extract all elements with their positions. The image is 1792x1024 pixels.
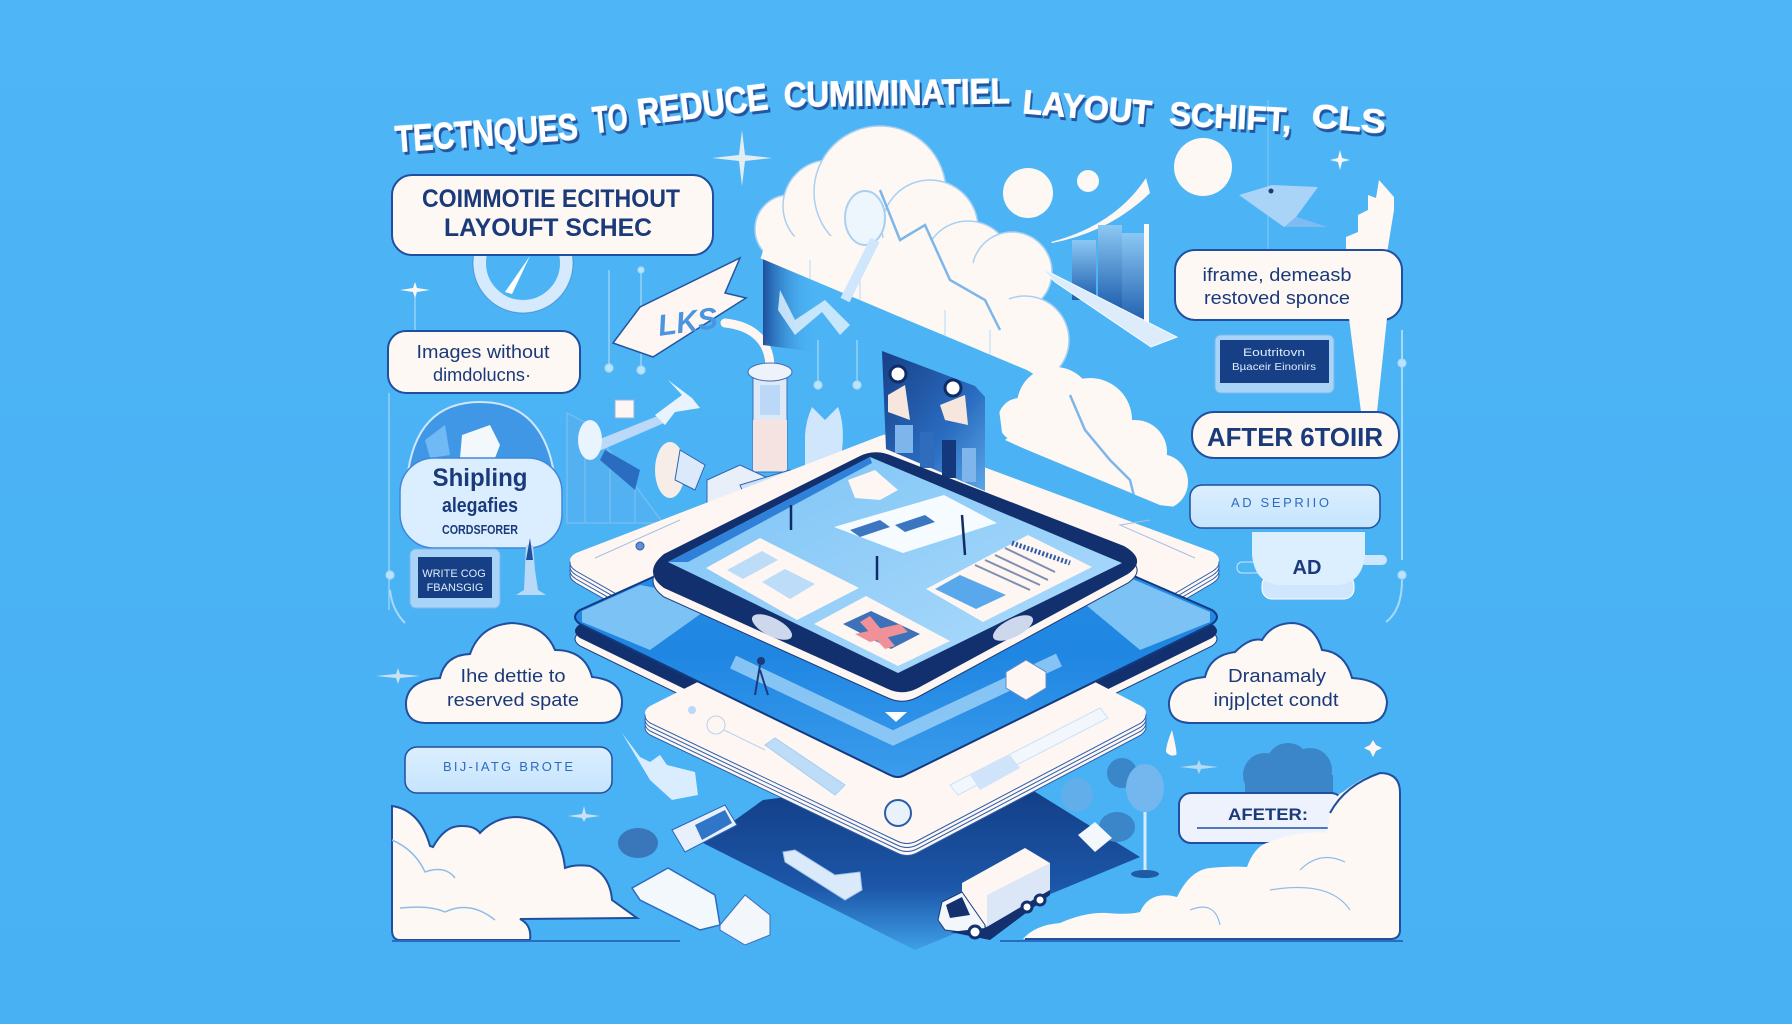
title: CUMIMINATIEL [783, 72, 1010, 115]
guide lines and dots [386, 100, 1406, 623]
panel: shipping globe callout [400, 402, 562, 548]
title: TO [591, 97, 630, 141]
panel: middle plate lower bands [575, 484, 1217, 799]
panel: navy label left: WRITE COG [422, 568, 486, 580]
illustration: chimney and smoke [707, 323, 800, 530]
panel: reserved space cloud [406, 623, 622, 723]
panel: navy label left [410, 549, 500, 608]
panel: light pill [405, 747, 612, 793]
panel: box compose without layout shift [392, 175, 713, 313]
title: CLS [1310, 97, 1387, 140]
panel: shipping globe callout: Shipling [432, 464, 528, 492]
panel: light pill: BIJ-IATG BROTE [443, 759, 573, 774]
illustration: pencil and box [578, 380, 700, 490]
panel: reserved space cloud: Ihe dettie to [460, 666, 566, 686]
panel: dramatically injected content cloud: injp|ctet condt [1214, 690, 1338, 710]
icon: droplet [1166, 730, 1176, 756]
icon: AD bowl: AD [1293, 557, 1321, 579]
icon: phone sheet [632, 868, 720, 930]
tablet buttons [748, 609, 796, 645]
title: TECTNQUES [394, 106, 579, 160]
chart: faded fence [567, 413, 663, 523]
tablet screen [668, 457, 1122, 673]
title: REDUCE [635, 76, 770, 133]
icon: light leaf [805, 407, 843, 480]
panel: reserved space cloud: reserved spate [447, 690, 579, 710]
card: upper [834, 470, 997, 553]
icon: small crate [720, 895, 770, 945]
sparkles [376, 130, 1382, 822]
icon: small glow [885, 712, 907, 722]
figure: person and basket [755, 657, 1046, 700]
icon: blue hat [618, 828, 658, 858]
card: image [814, 596, 950, 666]
illustration: truck [938, 848, 1050, 940]
cloud: bottom left [392, 806, 680, 941]
panel: ad pill: AD SEPRIIO [1231, 495, 1329, 510]
lighter plate corners [582, 578, 1210, 650]
chart: bars on plate [1041, 178, 1177, 347]
icon: tool on shadow [783, 850, 862, 900]
illustration: top circles [1003, 138, 1232, 218]
illustration: large cloud [755, 126, 1069, 400]
panel: iframe callout with spire: restoved sponce [1204, 288, 1350, 308]
panel: dark screen with figures [882, 351, 985, 491]
panel: images without dimensions: dimdolucns· [433, 365, 531, 385]
globe dome [407, 402, 555, 480]
panel: after label with cloud [1000, 773, 1403, 941]
icon: LKS arrow sign [613, 258, 746, 357]
slider tube [733, 660, 1059, 738]
panel: ad pill [1190, 485, 1380, 528]
panel: after pill: AFTER 6TOIIR [1207, 422, 1383, 452]
icon: AD bowl [1237, 532, 1387, 599]
icon: magnifier [845, 191, 885, 300]
illustration: dark panel fading [763, 257, 850, 352]
cloud: bottom right [1000, 773, 1403, 941]
panel: navy label right [1215, 335, 1334, 393]
panel: navy label right: Eoutritovn [1243, 347, 1305, 359]
panel: shipping globe callout: alegafies [442, 495, 518, 517]
icon: white arrow [622, 733, 698, 800]
card: document [926, 535, 1092, 622]
panel: images without dimensions [388, 331, 580, 393]
icon: paper plane [1239, 185, 1327, 227]
illustration: trees [1061, 758, 1164, 878]
illustration: camera [655, 442, 705, 498]
panel: box compose without layout shift: COIMMOTIE ECITHOUT [422, 185, 680, 213]
card: text blocks [706, 538, 859, 620]
panel: shipping globe callout: CORDSFORER [442, 522, 518, 537]
panel: navy label right: Bµaceir Einonirs [1232, 362, 1316, 373]
panel: images without dimensions: Images without [416, 342, 550, 362]
panel: dramatically injected content cloud: Dranamaly [1228, 666, 1326, 686]
title: LAYOUT [1021, 83, 1153, 131]
panel: after pill [1192, 412, 1399, 458]
panel: iframe callout with spire: iframe, demeasb [1202, 265, 1352, 285]
panel: bottom white plate [645, 580, 1146, 856]
panel: main tablet [653, 452, 1137, 701]
panel: navy label left: FBANSGIG [427, 582, 483, 594]
illustration: second cloud [998, 367, 1188, 510]
panel: dramatically injected content cloud [1169, 623, 1387, 723]
icon: gauge ring [473, 213, 573, 313]
icon: dark cloud [1243, 743, 1333, 797]
icon: LKS arrow sign: LKS [656, 302, 720, 343]
panel: iframe callout with spire [1175, 180, 1402, 412]
infographic canvas [376, 78, 1407, 950]
panel: rear white plate [570, 434, 1219, 765]
icon: lighthouse [516, 538, 546, 595]
title: SCHIFT, [1169, 95, 1292, 138]
panel: tablet floating shadow [703, 770, 1140, 950]
panel: box compose without layout shift: LAYOUFT SCHEC [444, 214, 652, 242]
figures [791, 505, 965, 580]
title [394, 72, 1387, 160]
panel: after label with cloud: AFETER: [1228, 805, 1308, 824]
icon: roller [672, 805, 737, 852]
panel: middle blue plate [575, 470, 1217, 777]
illustrations: small items on ground [618, 805, 862, 945]
